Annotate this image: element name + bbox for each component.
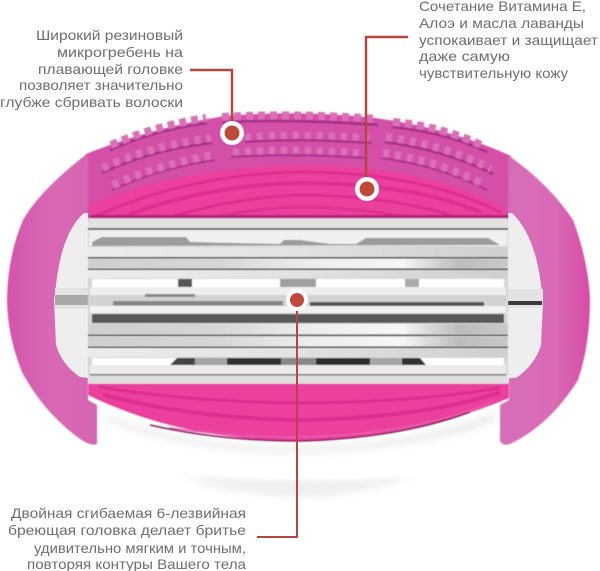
hot pink top insert: [90, 165, 508, 219]
side piece left: [7, 153, 97, 445]
callout: comb leader: [190, 70, 244, 145]
upper gap: [92, 279, 504, 287]
text: vitamin description: чувствительную кожу: [419, 65, 568, 81]
text: comb description: позволяет значительно: [19, 77, 183, 93]
marker: conditioning strip: [355, 177, 379, 201]
dark gap: [92, 314, 504, 323]
text: vitamin description: Алоэ и масла лаванды: [419, 15, 584, 31]
marker: comb: [220, 121, 244, 145]
middle bar: [90, 287, 506, 295]
white window left: [54, 213, 88, 378]
text: comb description: глубже сбривать волоски: [0, 94, 183, 110]
text: blades description: [8, 505, 246, 571]
side piece right: [500, 155, 590, 445]
callout: conditioning strip leader: [355, 37, 408, 201]
text: comb description: микрогребень на: [57, 44, 183, 60]
callout: blades leader: [257, 289, 308, 537]
lower gap: [92, 358, 504, 365]
comb ridges left: [102, 118, 215, 190]
text: blades description: удивительно мягким и точным,: [34, 540, 246, 556]
marker: blades: [286, 289, 308, 311]
text: comb description: плавающей головке: [38, 61, 183, 77]
blade assembly: [88, 218, 508, 384]
side pivots: [55, 288, 543, 309]
text: vitamin description: [419, 0, 599, 81]
top guard: [88, 219, 508, 228]
text: vitamin description: даже самую: [419, 48, 510, 64]
text: blades description: бреющая головка делает бритье: [8, 522, 246, 538]
text: comb description: [0, 27, 183, 110]
hot pink bottom insert: [88, 383, 509, 441]
text: blades description: Двойная сгибаемая 6-лезвийная: [11, 505, 246, 521]
text: vitamin description: успокаивает и защищает: [419, 32, 599, 48]
bottom guard: [90, 365, 506, 374]
cartridge magenta top body: [86, 113, 511, 222]
comb ridges center: [222, 115, 378, 158]
text: comb description: Широкий резиновый: [36, 27, 183, 43]
lower blade bands: [88, 324, 508, 334]
white base with shadow: [97, 400, 500, 497]
comb ridges right: [382, 122, 493, 190]
blade bands: [88, 247, 508, 257]
white window right: [508, 213, 543, 378]
